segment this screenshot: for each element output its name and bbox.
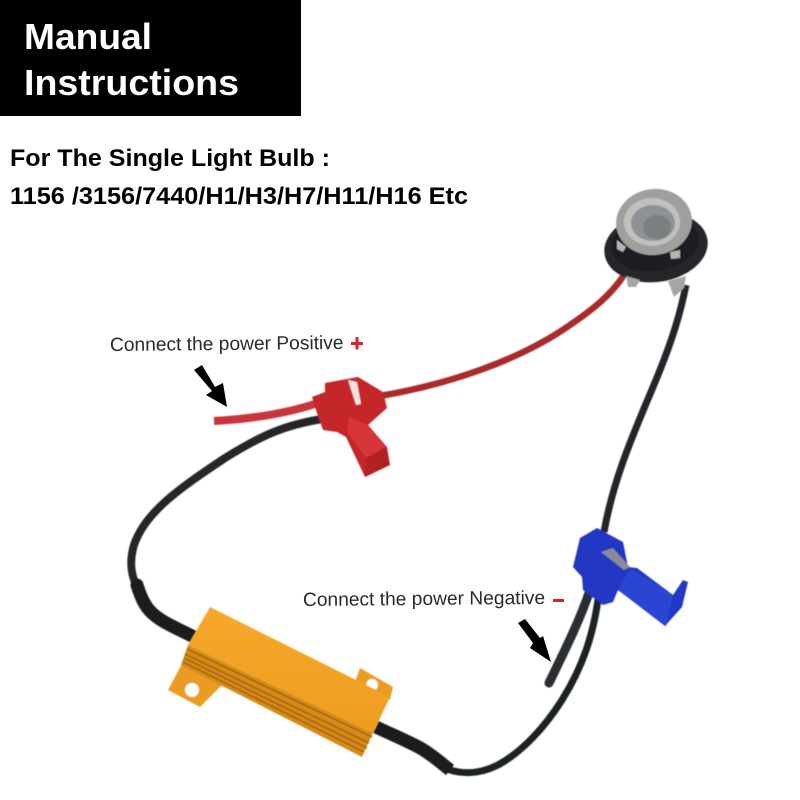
heat shrink on left wire bbox=[137, 585, 192, 636]
subtitle: compatible bulbs: For The Single Light Bulb : bbox=[10, 145, 330, 172]
wiring diagram bbox=[131, 184, 712, 773]
label: power negative: Connect the power Negative bbox=[303, 588, 545, 611]
red wire: connector to socket bbox=[380, 278, 622, 396]
blue T-tap connector bbox=[573, 528, 688, 626]
title banner: Manual bbox=[24, 16, 152, 57]
black wire: connector to resistor bbox=[131, 419, 322, 587]
label: power positive: Connect the power Positive bbox=[110, 333, 344, 356]
title banner bbox=[0, 0, 301, 116]
subtitle: compatible bulbs bbox=[10, 145, 468, 210]
arrow: to negative wire bbox=[518, 619, 551, 662]
red T-tap connector bbox=[312, 377, 390, 477]
black wire: connector to socket bbox=[604, 285, 686, 532]
black negative tail bbox=[549, 590, 590, 683]
arrow: to positive wire bbox=[194, 365, 227, 407]
title banner: Instructions bbox=[24, 62, 239, 103]
heat shrink on right wire bbox=[376, 727, 450, 770]
subtitle: compatible bulbs: 1156 /3156/7440/H1/H3/H7/H11/H16 Etc bbox=[10, 183, 468, 210]
bulb socket bbox=[600, 184, 712, 297]
black wire: resistor to negative tap bbox=[440, 592, 599, 773]
red wire tail bbox=[214, 403, 318, 421]
gold load resistor bbox=[168, 607, 393, 757]
